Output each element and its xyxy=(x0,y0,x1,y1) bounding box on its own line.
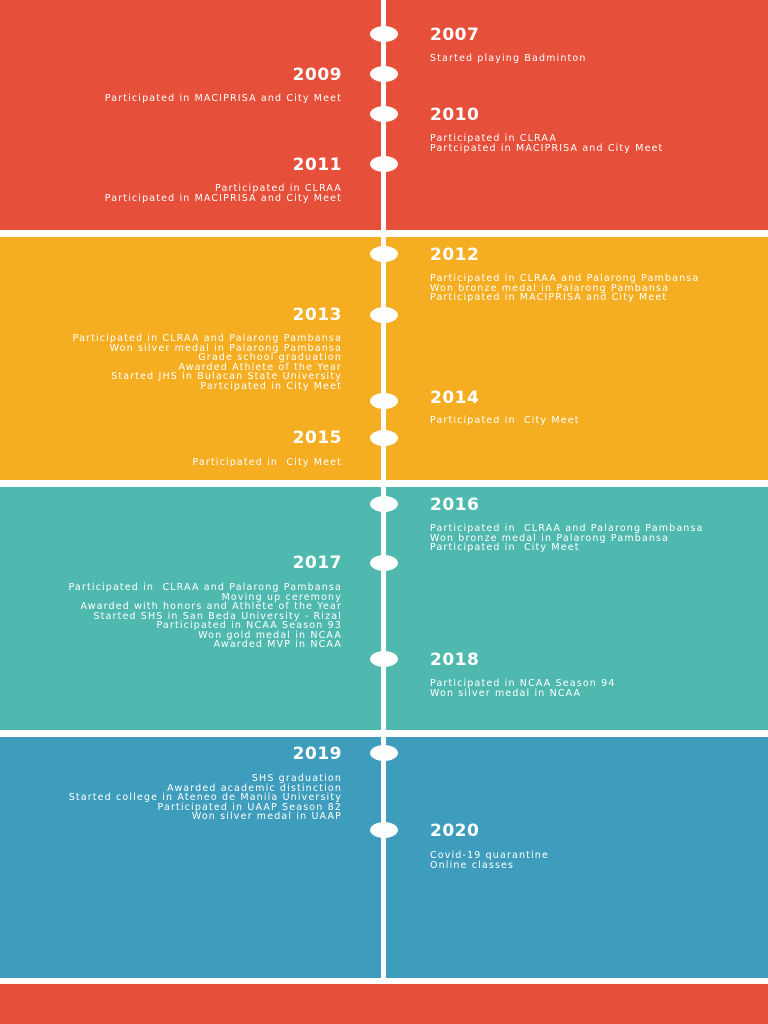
text: SHS graduation xyxy=(252,773,342,784)
text: Awarded MVP in NCAA xyxy=(214,639,342,650)
text: Started JHS in Bulacan State University xyxy=(111,371,342,382)
text: Grade school graduation xyxy=(198,352,342,363)
band: yellow xyxy=(0,237,768,480)
entry 2012: 2012 xyxy=(430,245,479,265)
entry 2009: 2009 xyxy=(293,65,342,85)
entry 2018: 2018 xyxy=(430,650,479,670)
timeline line xyxy=(381,0,386,980)
text: Participated in CLRAA and Palarong Pambansa xyxy=(430,273,699,284)
text: Started playing Badminton xyxy=(430,53,587,64)
text: Participated in City Meet xyxy=(192,457,342,468)
text: Awarded academic distinction xyxy=(167,782,342,794)
text: Participated in CLRAA and Palarong Pambansa xyxy=(430,523,704,534)
text: Participated in MACIPRISA and City Meet xyxy=(105,192,342,204)
text: Won bronze medal in Palarong Pambansa xyxy=(430,532,669,544)
entry 2016: 2016 xyxy=(430,495,479,515)
text: Participated in NCAA Season 94 xyxy=(430,678,616,689)
entry 2013: 2013 xyxy=(293,305,342,325)
text: Participated in City Meet xyxy=(430,415,580,426)
dots xyxy=(370,26,398,838)
text: Won bronze medal in Palarong Pambansa xyxy=(430,282,669,294)
text: Partcipated in MACIPRISA and City Meet xyxy=(430,142,663,154)
text: Won silver medal in Palarong Pambansa xyxy=(110,342,342,354)
text: Participated in UAAP Season 82 xyxy=(158,802,342,812)
band: red xyxy=(0,0,768,230)
entry 2017: 2017 xyxy=(293,553,342,573)
text: Participated in CLRAA and Palarong Pambansa xyxy=(68,582,342,593)
text: Won silver medal in NCAA xyxy=(430,688,581,698)
text: Participated in City Meet xyxy=(430,542,580,553)
text: Participated in NCAA Season 93 xyxy=(156,620,342,631)
text: Awarded Athlete of the Year xyxy=(179,362,342,372)
text: Started college in Ateneo de Manila University xyxy=(69,792,342,803)
band: blue xyxy=(0,737,768,978)
text: Online classes xyxy=(430,860,514,870)
entry 2019: 2019 xyxy=(293,744,342,764)
text: Covid-19 quarantine xyxy=(430,850,549,861)
band: bottom red xyxy=(0,984,768,1024)
entry 2014: 2014 xyxy=(430,388,479,408)
entry 2011: 2011 xyxy=(293,155,342,175)
band: teal xyxy=(0,487,768,730)
text: Participated in CLRAA and Palarong Pambansa xyxy=(73,333,342,344)
text: Started SHS in San Beda University - Rizal xyxy=(93,610,342,622)
entry 2010: 2010 xyxy=(430,105,479,125)
text: Participated in MACIPRISA and City Meet xyxy=(430,292,667,303)
entry 2020: 2020 xyxy=(430,821,479,841)
text: Participated in MACIPRISA and City Meet xyxy=(105,93,342,104)
entry 2015: 2015 xyxy=(293,428,342,448)
entry 2007: 2007 xyxy=(430,25,479,45)
text: Moving up ceremony xyxy=(222,592,342,602)
text: Participated in CLRAA xyxy=(430,133,557,144)
text: Partcipated in City Meet xyxy=(200,380,342,392)
text: Awarded with honors and Athlete of the Year xyxy=(81,601,342,612)
text: Participated in CLRAA xyxy=(215,183,342,194)
text: Won silver medal in UAAP xyxy=(192,811,342,822)
text: Won gold medal in NCAA xyxy=(198,630,342,640)
